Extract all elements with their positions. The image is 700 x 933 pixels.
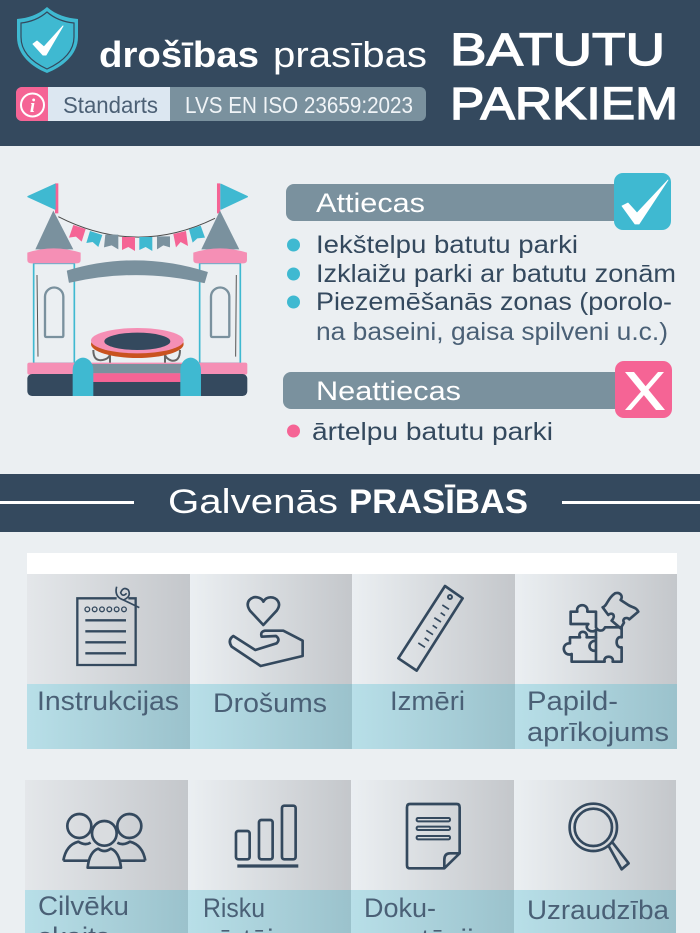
title: drošības prasības: drošības <box>99 34 259 75</box>
card: Cilvēku skaits: Cilvēku <box>38 891 129 921</box>
list: applies: Iekštelpu batutu parki <box>316 231 578 259</box>
list: does not apply: ārtelpu batutu parki <box>312 418 553 446</box>
title: BATUTU PARKIEM: BATUTU <box>450 24 665 75</box>
section heading band: PRASĪBAS <box>349 483 528 521</box>
icon: checklist <box>77 587 139 665</box>
icon: bar chart <box>236 806 298 866</box>
icon: cross <box>615 361 672 418</box>
icon: check <box>614 173 671 230</box>
card: Cilvēku skaits <box>25 780 188 933</box>
bunting <box>58 217 215 237</box>
card: Dokumentācija: Doku- <box>364 893 436 923</box>
base <box>27 363 247 375</box>
section heading band: Galvenās <box>168 483 338 521</box>
card: Izmēri: Izmēri <box>390 686 465 716</box>
card: Uzraudzība <box>514 780 676 933</box>
standard badge <box>16 87 426 121</box>
list: applies: na baseini, gaisa spilveni u.c.) <box>316 318 668 346</box>
icon: puzzle <box>564 593 638 662</box>
list: applies: Izklaižu parki ar batutu zonām <box>316 260 676 288</box>
icon: shield <box>17 7 78 73</box>
card: Instrukcijas <box>27 574 190 749</box>
card: Izmēri <box>352 574 515 749</box>
card: Uzraudzība: Uzraudzība <box>527 895 670 925</box>
card: Papildaprīkojums: Papild- <box>527 686 618 716</box>
flags <box>55 183 220 213</box>
title: BATUTU PARKIEM <box>450 24 678 129</box>
card: Drošums <box>190 574 352 749</box>
card: Drošums: Drošums <box>213 688 327 718</box>
standard badge: LVS EN ISO 23659:2023 <box>185 92 413 118</box>
icon: magnifier <box>570 804 629 869</box>
icon: info: i <box>30 96 36 117</box>
card: Risku vērtējums: Risku <box>203 893 265 923</box>
header band <box>0 0 700 146</box>
section heading band <box>0 474 700 532</box>
white strip <box>27 553 677 574</box>
card: Papildaprīkojums: aprīkojums <box>527 717 669 747</box>
icon: ruler <box>398 586 463 671</box>
icon: document <box>407 804 460 868</box>
panel: Neattiecas <box>283 361 672 446</box>
trampoline <box>93 350 180 365</box>
panel: Attiecas <box>286 173 676 346</box>
card: Instrukcijas: Instrukcijas <box>37 686 179 716</box>
list: applies <box>287 231 676 346</box>
icon: people <box>63 814 145 868</box>
card: Papildaprīkojums <box>515 574 677 749</box>
icon: hand with heart <box>230 597 303 666</box>
title: BATUTU PARKIEM: PARKIEM <box>450 78 678 129</box>
standard badge: Standarts <box>63 92 158 118</box>
list: applies: Piezemēšanās zonas (porolo- <box>316 288 672 316</box>
windows <box>45 287 229 337</box>
icon: info <box>21 94 44 117</box>
towers <box>34 263 74 363</box>
title: drošības prasības <box>99 34 427 75</box>
panel: Attiecas: Attiecas <box>316 188 425 218</box>
arch <box>67 261 207 283</box>
illustration: bouncy castle with trampoline <box>27 183 247 396</box>
title: drošības prasības: prasības <box>273 34 427 75</box>
card: Risku vērtējums <box>188 780 351 933</box>
panel: Neattiecas: Neattiecas <box>316 376 461 406</box>
card: Dokumentācija <box>351 780 514 933</box>
